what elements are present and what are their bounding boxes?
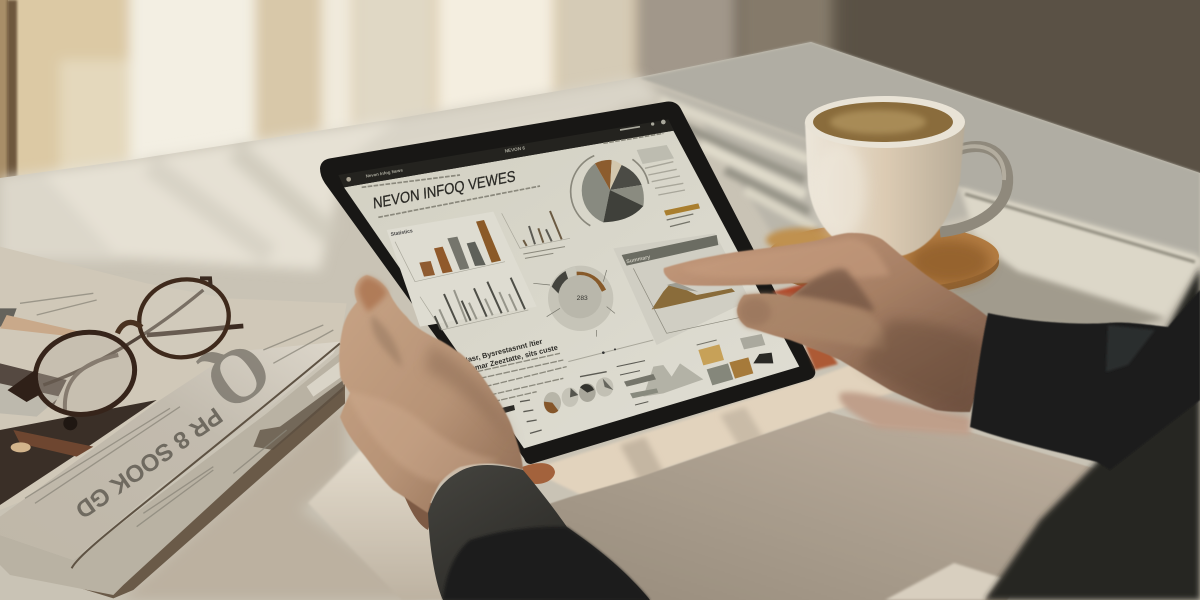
right hand bbox=[664, 233, 988, 412]
finger behind tablet bbox=[522, 463, 555, 484]
cup handle bbox=[940, 146, 1008, 232]
article text block: mmar Zeeztatte, sits custe bbox=[468, 343, 559, 374]
right sleeve and torso bbox=[970, 268, 1200, 600]
tablet body bbox=[320, 102, 815, 464]
left sleeve bbox=[428, 465, 650, 600]
glasses bbox=[12, 271, 243, 430]
table lower left bbox=[120, 400, 430, 600]
article text block bbox=[462, 337, 567, 402]
table sunlit left bbox=[0, 77, 660, 270]
tablet bbox=[320, 102, 815, 464]
donut chart bbox=[533, 266, 653, 362]
tablet status bar: NEVON 6 bbox=[504, 145, 526, 154]
panel: bar chart large: Statistics bbox=[390, 228, 413, 238]
table ledge bright band bbox=[961, 188, 1200, 318]
newspaper headline: PR 8 SOOK GD bbox=[70, 402, 227, 524]
pie legend panel bbox=[637, 145, 700, 227]
mountain chart with bars bbox=[617, 361, 703, 405]
table grey upper right bbox=[640, 42, 1200, 258]
hand shadow between fingers bbox=[790, 269, 875, 312]
coffee cup bbox=[805, 96, 1008, 258]
panel: area chart: Summary bbox=[626, 254, 651, 265]
second finger bbox=[739, 293, 886, 350]
lower finger under hand bbox=[403, 493, 436, 530]
pie chart bbox=[556, 138, 664, 245]
background wall and curtains bbox=[0, 0, 1200, 240]
article text block: Nasr, Bysrestasnnt /tier bbox=[462, 337, 543, 365]
table stripes near cup bbox=[650, 85, 970, 260]
donut chart: 283 bbox=[577, 295, 588, 302]
tablet screen bbox=[344, 131, 799, 448]
newspaper with glasses bbox=[0, 247, 347, 598]
panel: small bar chart bbox=[502, 211, 570, 258]
infographic title: NEVON INFOQ VEWES bbox=[373, 168, 516, 213]
left hand bbox=[339, 275, 555, 530]
tablet status bar bbox=[338, 119, 674, 187]
small pie charts bbox=[500, 372, 613, 433]
thumb shading bbox=[358, 277, 387, 312]
finger shadow on table bbox=[839, 392, 970, 435]
panel: area chart bbox=[613, 233, 750, 345]
newspaper lower folded pages bbox=[0, 352, 343, 595]
newspaper photo dark bbox=[0, 400, 157, 505]
newspaper upper page bbox=[0, 247, 347, 510]
newspaper big letter: Q bbox=[190, 324, 287, 428]
panel: bar chart large bbox=[387, 212, 537, 327]
back of hand shade bbox=[860, 320, 985, 412]
panel: bar chart lower bbox=[420, 278, 528, 330]
newspaper front fold bbox=[0, 342, 340, 560]
tablet status bar: Nevon Infog News bbox=[365, 167, 404, 179]
colored tiles bbox=[697, 334, 773, 385]
slab and sun patches bbox=[308, 365, 1100, 600]
index finger highlight bbox=[680, 238, 890, 278]
coaster shadow bbox=[945, 250, 1165, 330]
newspaper bottom edge bbox=[0, 383, 345, 598]
subtitle lines bbox=[362, 133, 663, 217]
newspaper text lines bbox=[20, 293, 333, 527]
orange reflection behind fingers bbox=[772, 282, 840, 370]
coaster bbox=[766, 223, 999, 296]
